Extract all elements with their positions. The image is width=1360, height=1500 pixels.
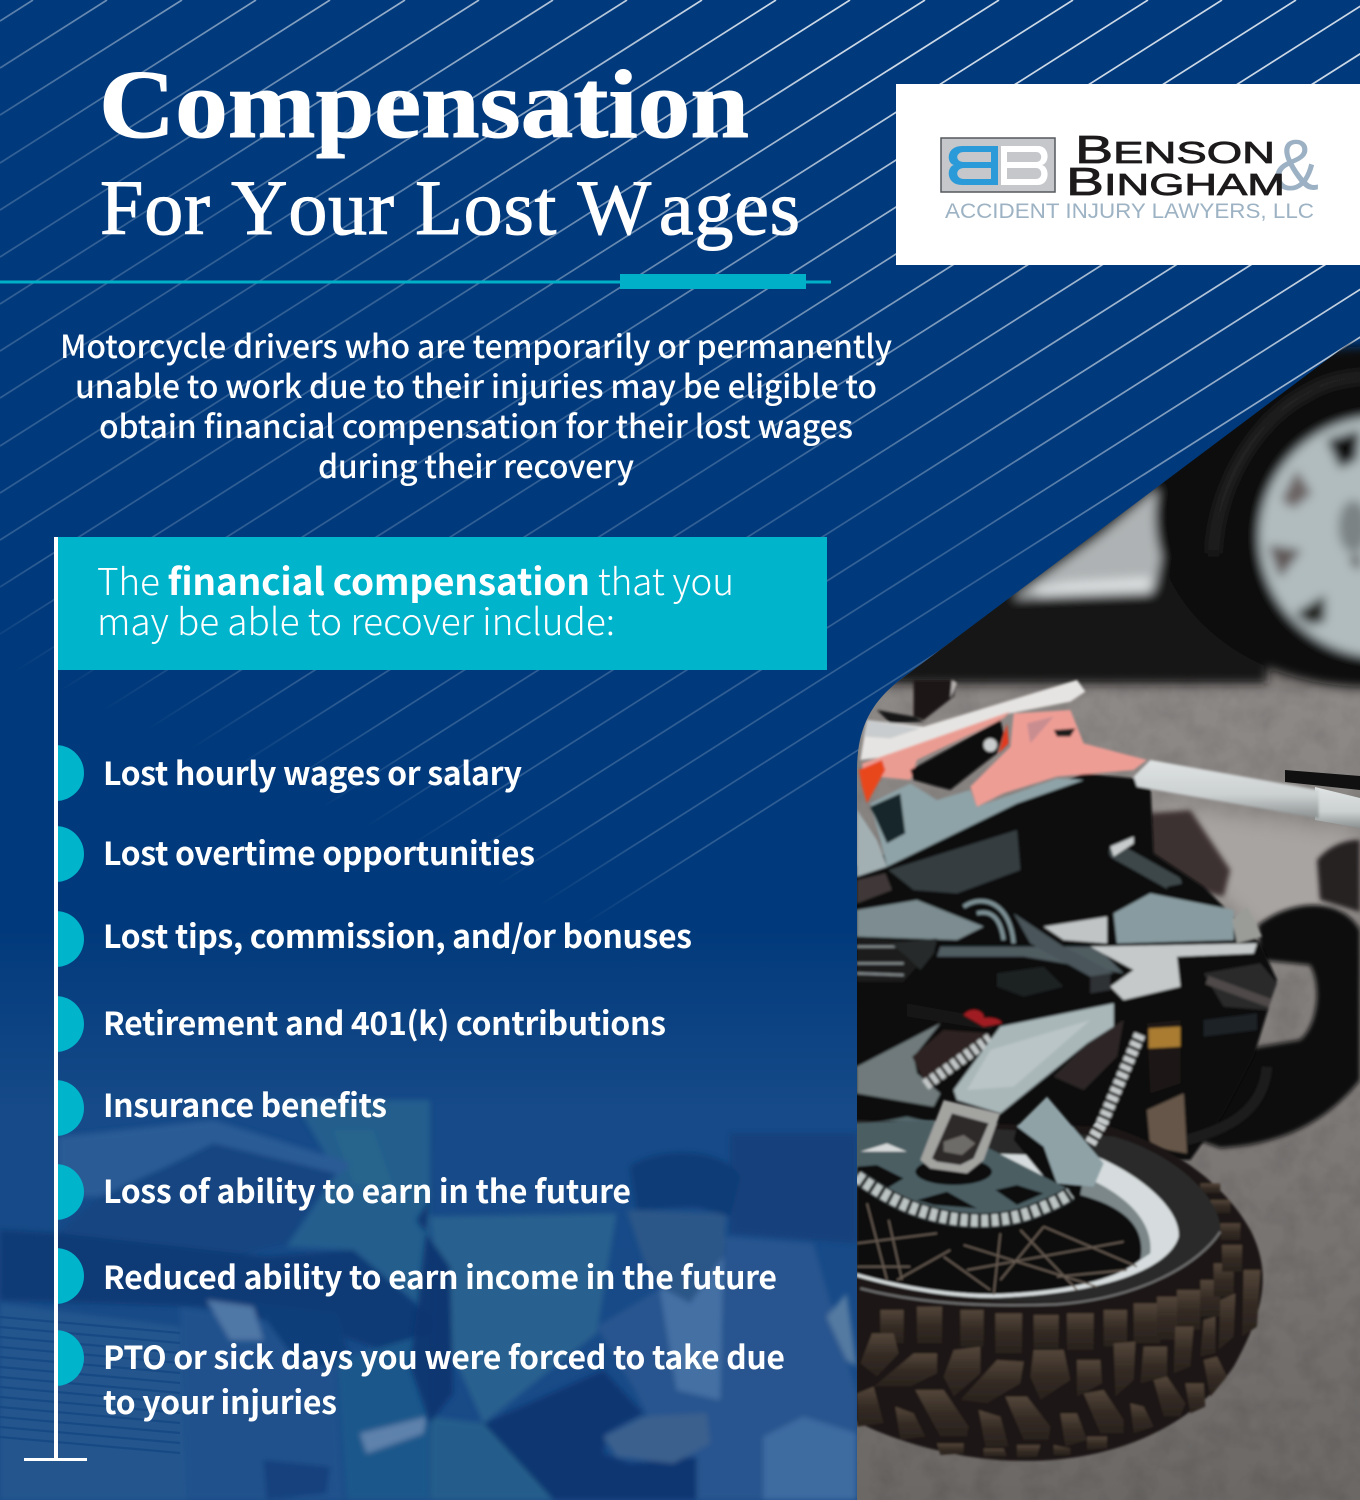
drive chain (857, 1177, 1070, 1221)
item 1: Lost hourly wages or salary (103, 749, 522, 795)
logo mark: BB monogram (941, 138, 1055, 192)
caliper (1017, 1097, 1104, 1187)
swingarm (954, 1003, 1114, 1113)
front wheel (854, 1097, 1263, 1461)
handlebar (1134, 760, 1319, 818)
left levers (857, 938, 937, 982)
wire loop (964, 901, 1014, 943)
wire bundle (937, 947, 1124, 973)
intro paragraph: during their recovery (318, 442, 634, 488)
rim inner (857, 1170, 1144, 1294)
white logo panel (896, 84, 1360, 265)
red hose (964, 1010, 1002, 1027)
blurred car (888, 338, 1360, 694)
lower chain (1092, 1033, 1140, 1147)
left plate (857, 1023, 940, 1107)
back wheel (1202, 836, 1360, 1151)
black window (910, 720, 1004, 790)
road stain (1147, 810, 1230, 897)
photo: crashed motorcycle with car behind (833, 330, 1360, 1500)
item 4: Retirement and 401(k) contributions (103, 999, 666, 1045)
shock absorber (1147, 1020, 1180, 1093)
callout banner (58, 537, 827, 670)
vertical timeline line (24, 537, 87, 1461)
intro paragraph: Motorcycle drivers who are temporarily or permanently (60, 322, 892, 368)
mirror (914, 680, 957, 720)
road (857, 640, 1360, 1500)
list bullets (28, 745, 84, 1386)
item 8 (103, 1333, 785, 1424)
engine covers (857, 900, 984, 940)
motorcycle body (854, 680, 1319, 1160)
intro paragraph (60, 322, 892, 488)
intro paragraph: unable to work due to their injuries may be eligible to (75, 362, 877, 408)
lower chain end (1090, 1120, 1104, 1143)
title rule (0, 274, 831, 289)
tire highlight (860, 1232, 1220, 1305)
frame tube (1117, 852, 1174, 883)
sprocket (854, 1120, 1070, 1223)
intro paragraph: obtain financial compensation for their lost wages (99, 402, 853, 448)
item 8: PTO or sick days you were forced to take due (103, 1333, 785, 1379)
engine mass (854, 773, 1277, 1160)
red accents (999, 723, 1009, 753)
title line 2: For Your Lost Wages (100, 164, 800, 251)
right engine (1204, 963, 1277, 1010)
banner line 1: The financial compensation that you (97, 552, 734, 606)
item 8: to your injuries (103, 1378, 337, 1424)
tread knobs row B (860, 1270, 1260, 1403)
title line 1: Compensation (99, 51, 749, 159)
crashed car (0, 1100, 430, 1500)
banner line 2: may be able to recover include: (97, 592, 615, 646)
logo tagline: ACCIDENT INJURY LAWYERS, LLC (945, 200, 1314, 223)
tread knobs row A (880, 1183, 1242, 1353)
item 2: Lost overtime opportunities (103, 829, 535, 875)
list of compensation items (103, 749, 785, 1424)
title (99, 51, 800, 251)
logo name: Benson: B ENSON (1075, 129, 1275, 172)
spokes (857, 1203, 1137, 1295)
chain adjuster (920, 1100, 1000, 1173)
left lower bits (858, 1096, 902, 1118)
man with clipboard (410, 1133, 857, 1500)
rim (857, 1150, 1179, 1298)
item 5: Insurance benefits (103, 1081, 387, 1127)
tire silhouette (854, 1120, 1263, 1461)
handlebar end (1285, 770, 1360, 790)
salmon strip (862, 712, 1010, 790)
white fairing (860, 680, 1085, 760)
logo name: Bingham: B INGHAM (1066, 161, 1285, 204)
silver bracket (1090, 943, 1257, 1000)
tread knobs row C (857, 1357, 1227, 1457)
logo ampersand: & (1273, 126, 1319, 206)
black lower hose (1187, 1067, 1267, 1140)
faded background photo: man beside crashed car (0, 1100, 857, 1500)
upper chain (925, 1038, 990, 1085)
sidewall (854, 1120, 1220, 1302)
item 6: Loss of ability to earn in the future (103, 1167, 631, 1213)
car grille slats (0, 1317, 180, 1453)
tank (870, 778, 1084, 867)
main salmon panel (970, 710, 1147, 807)
item 3: Lost tips, commission, and/or bonuses (103, 912, 692, 958)
item 7: Reduced ability to earn income in the future (103, 1253, 777, 1299)
